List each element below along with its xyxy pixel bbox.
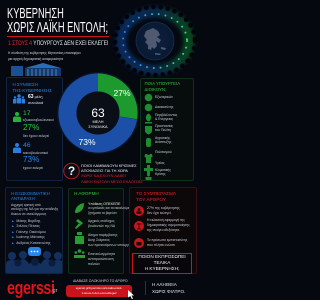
red title underline [7, 36, 109, 37]
heading: composition: Η ΣΥΝΘΕΣΗ [12, 82, 38, 86]
item: legitimacy [147, 218, 190, 232]
item: initial assignment [88, 219, 115, 228]
stat: 63 members: 63 μέλη [28, 94, 43, 100]
logo suffix: .gr [51, 288, 57, 294]
heading: reaction: Η ΕΞΩΚΟΜΜΑΤΙΚΗ [11, 190, 50, 196]
intro text: μια αρχική δημοκρατική αναφορικότητα [8, 56, 63, 60]
icon: gavel [75, 219, 83, 229]
heading: composition [12, 82, 52, 92]
callout box: ΤΕΛΙΚΑ [154, 260, 170, 265]
ministry: health: Υγείας [155, 161, 165, 165]
item: legitimacy: Η εκλεκτική εφαρμογή της [147, 218, 185, 222]
reaction text [11, 202, 58, 216]
item: trust: που πλήττει ενώνει [147, 243, 175, 247]
question text: ΠΟΙΟΙ ΛΑΜΒΑΝΟΥΝ ΚΡΙΣΙΜΕΣ [81, 162, 137, 168]
stat: 63 members: συνολικά [28, 100, 43, 104]
stat: 46 elected: 46 [23, 142, 31, 149]
list of names [11, 219, 50, 245]
icon: blue person [13, 143, 21, 153]
ministry: climate: Κλιματικής [155, 168, 171, 172]
button: link [66, 285, 132, 297]
heading: composition: ΤΗΣ ΚΥΒΕΡΝΗΣΗΣ [12, 88, 52, 92]
stat: 27 percent: 27% [23, 123, 39, 132]
item: re-election: αντιπροσώπευση [88, 257, 114, 261]
item: OPEKEPE: οι εμπλοκές και τα εκκαλούμενα [88, 206, 133, 210]
item: 27 percent: 27% της κυβέρνησης [147, 206, 180, 210]
crowd illustration [6, 247, 62, 273]
question text: ΛΑΪΚΗ ΕΝΤΟΛΗ ΜΕΣΩ ΕΚΛΟΓΩΝ; [81, 179, 143, 184]
reaction text: Αιχμηρή κριτική από [11, 202, 41, 206]
logo: egerssi [7, 278, 55, 298]
item: intervention: Άκης Σκέρτσος [88, 238, 110, 242]
ministry icons [144, 94, 153, 180]
item: re-election [88, 252, 115, 266]
stat: 17 unelected: 17 [23, 110, 31, 117]
item: re-election: Επανεκλογιμότητα [88, 252, 115, 256]
background ring of ministers with map of Greece [113, 4, 196, 78]
reaction text: θώκων σε ανεκλόγιμους [11, 212, 46, 216]
title [7, 6, 108, 36]
ministry: citizen protection: του Πολίτη [155, 128, 171, 132]
ministry: citizen protection: Προστασίας [155, 124, 173, 128]
subtitle: 1 ΣΤΟΥΣ 4 ΥΠΟΥΡΓΟΥΣ ΔΕΝ ΕΧΕΙ ΕΚΛΕΓΕΙ [8, 40, 108, 47]
heading: ministries: ΔΙΟΙΚΟΥΝ; [144, 86, 166, 92]
icon: scales [134, 221, 144, 231]
item: 27 percent [147, 206, 180, 215]
reaction text: στελέχη της ΝΔ για την ανάδειξη [11, 207, 58, 211]
item: intervention: Αίτημα παρέμβασης [88, 233, 117, 237]
question text: ΑΠΟΦΑΣΕΙΣ ΓΙΑ ΤΗ ΧΩΡΑ [81, 168, 128, 173]
panel: trigger [68, 188, 124, 274]
icon: people [74, 249, 85, 258]
heading: ministries [144, 80, 180, 92]
icon: official [75, 232, 84, 244]
centre label: ΜΕΛΗ [93, 120, 104, 124]
label: parliamentary: κοινοβουλευτικοί [23, 150, 48, 154]
item: legitimacy: της ανοίγει αδεξιότητα. [147, 228, 180, 232]
button: link: egerssi.gr/kyvernisi-xoris-laiki-entoli- [76, 286, 122, 290]
item: re-election: πολιτών [88, 262, 100, 266]
ministry: environment: & Ενέργειας [155, 117, 173, 121]
segment: 73 percent [50, 65, 146, 161]
icon: leaf [75, 203, 84, 213]
tagline: Η ΑΛΗΘΕΙΑ [152, 282, 177, 287]
icon: green person [13, 112, 21, 122]
icon: podium [134, 238, 144, 248]
label: not elected: δεν έχουν εκλεγεί [23, 134, 49, 138]
button: link: 1-stous-4-den-exei-eklegei/ [81, 291, 117, 295]
item: intervention [88, 233, 133, 247]
heading: conclusion: ΤΟΥ ΑΡΘΡΟΥ [136, 196, 166, 202]
icon: group of people [13, 94, 25, 104]
ministry: citizen protection [155, 124, 173, 132]
callout box: Η ΚΥΒΕΡΝΗΣΗ; [145, 266, 179, 271]
intro text [8, 50, 81, 61]
stat: 73 percent: 73% [23, 155, 39, 164]
question text: ΧΩΡΙΣ ΝΑ ΕΧΟΥΝ ΛΑΒΕΙ [81, 173, 126, 178]
list of names: ▲ Στέλιος Πέτσας [11, 224, 40, 228]
tagline: ΧΩΡΙΣ ΦΙΛΤΡΟ. [152, 289, 185, 294]
stat: 63 members [28, 94, 44, 104]
icon: parliament building [11, 63, 61, 76]
percent labels: 27% [113, 88, 131, 98]
item: OPEKEPE: ζητήματα τα βαρύνει [88, 210, 117, 214]
ministry: culture: Πολιτισμού [155, 150, 172, 154]
heading: conclusion: ΤΟ ΣΥΜΠΕΡΑΣΜΑ [136, 190, 176, 196]
panel: government composition [6, 77, 63, 181]
label: non-parliamentary: εξωκοινοβουλευτικοί [23, 118, 54, 122]
ministry: justice: Δικαιοσύνης [155, 105, 173, 109]
heading: reaction [11, 190, 50, 201]
item: initial assignment: Αρχικός ανάδοχος [88, 219, 115, 223]
list of names: ▲ Ανδρέας Κατσανιώτης [11, 241, 50, 245]
icon: cursor [128, 290, 134, 299]
list of names: ▲ Ιωάννης Μάνιατης [11, 235, 45, 239]
heading: reaction: ΑΝΤΙΔΡΑΣΗ [11, 196, 35, 201]
item: trust [147, 238, 188, 247]
centre label: 63 [91, 106, 105, 120]
item: legitimacy: δημοκρατικής νομιμοποίησης [147, 222, 190, 226]
item: trust: Το πρόσωπο εμπιστοσύνης [147, 238, 187, 242]
ministry: environment: Περιβάλλοντος [155, 113, 177, 117]
panel: ministries [140, 78, 194, 181]
ministry: agriculture [155, 136, 172, 144]
list of names: ▲ Γιάννης Οικονόμου [11, 230, 46, 234]
intro text: Η σύνθεση της κυβέρνησης Μητσοτάκη επαναφέρει [8, 50, 81, 54]
ministry: agriculture: Αγροτικής [155, 136, 170, 140]
panel: reaction [5, 187, 63, 274]
item: intervention: των προτεινόμενων υπουργών [88, 243, 133, 247]
item: 27 percent: δεν έχει εκλεγεί. [147, 210, 172, 214]
heading: ministries: ΠΟΙΑ ΥΠΟΥΡΓΕΙΑ [144, 80, 180, 86]
read article label: ΔΙΑΒΑΣΕ ΟΛΟΚΛΗΡΟ ΤΟ ΑΡΘΡΟ [73, 278, 128, 282]
divider [144, 281, 147, 295]
label: elected: έχουν εκλεγεί [23, 166, 43, 170]
ministry: climate: Κρίσης [155, 172, 166, 176]
callout box: ΠΟΙΟΝ ΕΚΠΡΟΣΩΠΕΙ [138, 254, 186, 259]
item: OPEKEPE: Υπόθεση ΟΠΕΚΕΠΕ [88, 202, 120, 206]
tagline [152, 281, 185, 295]
icon: question mark: ? [68, 164, 75, 178]
title: ΧΩΡΙΣ ΛΑΪΚΗ ΕΝΤΟΛΗ; [7, 20, 108, 36]
percent labels: 73% [78, 137, 96, 147]
donut chart [57, 72, 139, 154]
ministry: agriculture: Ανάπτυξης [155, 140, 171, 144]
item: initial assignment: βουλευτών της ΝΔ [88, 224, 115, 228]
title: ΚΥΒΕΡΝΗΣΗ [7, 6, 64, 22]
question text [81, 162, 143, 184]
heading: trigger: Η ΑΦΟΡΜΗ [74, 191, 99, 196]
centre label [88, 106, 108, 129]
centre label: ΣΥΝΟΛΙΚΑ [88, 125, 108, 129]
icon: question mark [63, 162, 80, 180]
ministry: environment [155, 113, 178, 121]
list of names: ▲ Μάκης Βορίδης [11, 219, 40, 223]
ministry list: Εξωτερικών [155, 95, 173, 99]
callout: question [63, 162, 143, 184]
heading: conclusion [136, 190, 176, 202]
percent labels [78, 88, 131, 147]
segment: 27 percent [98, 73, 138, 119]
callout box [132, 252, 192, 274]
panel: conclusion [129, 187, 197, 274]
ministry: climate [155, 168, 171, 176]
item: OPEKEPE [88, 202, 133, 215]
icon: group red [134, 206, 144, 216]
